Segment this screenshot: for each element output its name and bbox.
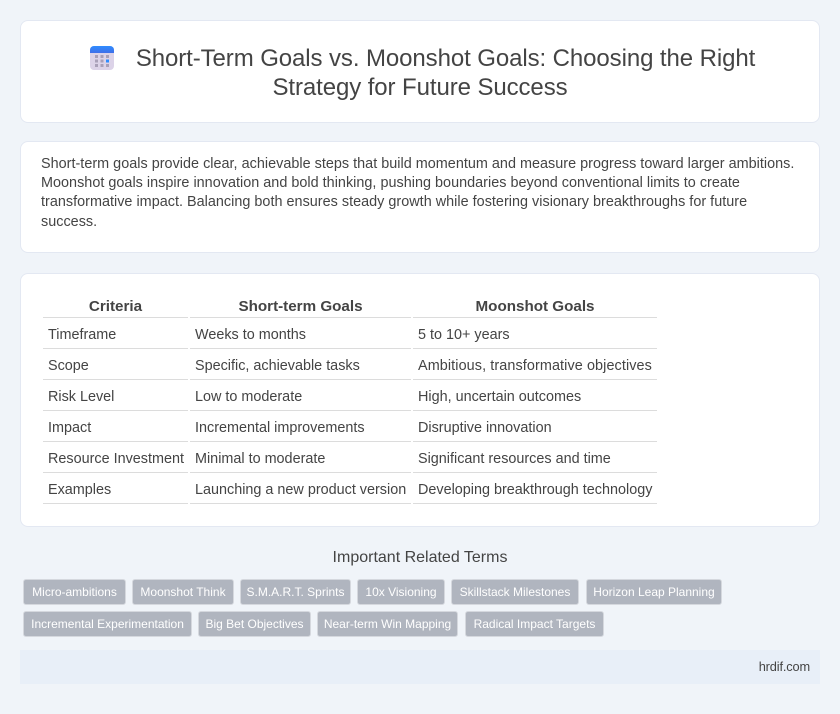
tag: Horizon Leap Planning (593, 585, 715, 599)
comparison table: Specific, achievable tasks (195, 358, 360, 374)
tag: 10x Visioning (365, 585, 437, 599)
row: Examples: Examples (48, 482, 111, 498)
tag (451, 579, 579, 605)
panel: title card (20, 20, 820, 123)
heading: Important Related Terms: Important Related Terms (333, 549, 507, 566)
tag list (23, 579, 722, 637)
title: Short-Term Goals vs. Moonshot Goals: Choosing the Right (136, 45, 755, 72)
comparison table: Launching a new product version (195, 482, 406, 498)
tag (240, 579, 351, 605)
comparison table (43, 298, 657, 504)
row: Resource Investment: Resource Investment (48, 451, 184, 467)
row: Risk Level: Risk Level (48, 389, 114, 405)
tag (357, 579, 445, 605)
comparison table: Low to moderate (195, 389, 302, 405)
tag (132, 579, 234, 605)
tag (465, 611, 604, 637)
row: Impact: Impact (48, 420, 91, 436)
comparison table: Ambitious, transformative objectives (418, 358, 652, 374)
comparison table: Minimal to moderate (195, 451, 325, 467)
panel: intro card (20, 141, 820, 253)
comparison table: Significant resources and time (418, 451, 611, 467)
tag: S.M.A.R.T. Sprints (246, 585, 345, 599)
tag: Skillstack Milestones (460, 585, 570, 599)
tag: Near-term Win Mapping (324, 617, 451, 631)
tag (23, 579, 126, 605)
header: Criteria: Criteria (89, 298, 142, 315)
header: Short-term Goals: Short-term Goals (238, 298, 363, 315)
comparison table: Developing breakthrough technology (418, 482, 652, 498)
text block: intro paragraph: success. (41, 214, 97, 230)
title (136, 45, 756, 101)
text block: intro paragraph: Short-term goals provide clear, achievable steps that build momentum and measure progress toward larger ambitions. (41, 156, 794, 172)
tag: Radical Impact Targets (474, 617, 595, 631)
tag (23, 611, 192, 637)
tag (586, 579, 722, 605)
tag (198, 611, 311, 637)
title: Strategy for Future Success (272, 74, 568, 101)
tag (317, 611, 458, 637)
panel: comparison table card (20, 273, 820, 527)
tag: Incremental Experimentation (31, 617, 184, 631)
comparison table: 5 to 10+ years (418, 327, 510, 343)
comparison table: Incremental improvements (195, 420, 365, 436)
text block: intro paragraph: Moonshot goals inspire innovation and bold thinking, pushing boundaries beyond conventional limits to create (41, 175, 740, 191)
row: Scope: Scope (48, 358, 89, 374)
comparison table: Disruptive innovation (418, 420, 552, 436)
row: Timeframe: Timeframe (48, 327, 116, 343)
comparison table: Weeks to months (195, 327, 306, 343)
footer (20, 650, 820, 684)
text block: intro paragraph (41, 156, 794, 230)
tag: Micro-ambitions (32, 585, 117, 599)
icon: calendar (90, 46, 114, 70)
text block: intro paragraph: transformative impact. Balancing both ensures steady growth while fostering visionary breakthroughs for future (41, 194, 747, 210)
footer text: hrdif.com (759, 659, 810, 674)
comparison table: High, uncertain outcomes (418, 389, 581, 405)
tag: Big Bet Objectives (205, 617, 304, 631)
tag: Moonshot Think (140, 585, 226, 599)
header: Moonshot Goals: Moonshot Goals (476, 298, 594, 315)
